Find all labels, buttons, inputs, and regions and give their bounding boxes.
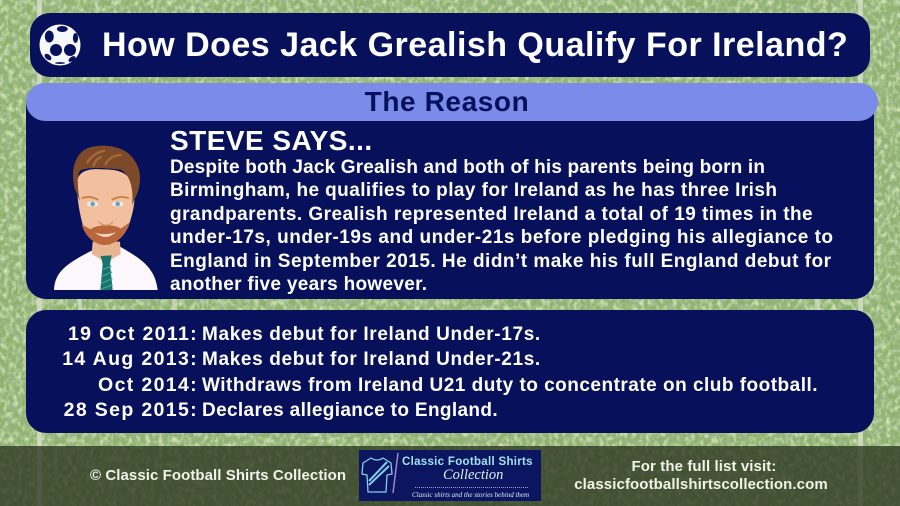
timeline dates: 14 Aug 2013: (62, 348, 198, 370)
timeline dates: Oct 2014: (98, 374, 198, 396)
timeline events: Makes debut for Ireland Under-21s. (202, 349, 541, 370)
timeline dates (62, 323, 198, 421)
hair highlights (87, 151, 122, 167)
eyebrows (82, 197, 129, 200)
reason paragraph: England in September 2015. He didn’t make his full England debut for (170, 251, 831, 272)
timeline dates: 19 Oct 2011: (68, 323, 198, 345)
title bar (30, 13, 870, 77)
logo name: Classic Football Shirts (402, 456, 533, 468)
shirt (54, 247, 158, 290)
heading band: The Reason (26, 83, 878, 121)
reason paragraph: grandparents. Grealish represented Ireland a total of 19 times in the (170, 204, 813, 225)
logo collection: Collection (443, 467, 503, 483)
logo tagline: Classic shirts and the stories behind them (412, 491, 529, 499)
tie stripes (101, 266, 113, 289)
footer copyright: © Classic Football Shirts Collection (90, 467, 346, 484)
beard (82, 223, 129, 245)
footer call to action: classicfootballshirtscollection.com (574, 476, 828, 493)
logo divider (392, 452, 399, 494)
footer call to action: For the full list visit: (632, 458, 776, 475)
timeline events: Makes debut for Ireland Under-17s. (202, 324, 541, 345)
icon: shirt (361, 457, 393, 493)
timeline events: Declares allegiance to England. (202, 400, 498, 421)
tie (100, 255, 113, 290)
reason paragraph: under-17s, under-19s and under-21s before pledging his allegiance to (170, 227, 834, 248)
nose (98, 222, 113, 225)
steve says heading: STEVE SAYS... (170, 125, 373, 156)
timeline dates: 28 Sep 2015: (64, 399, 198, 421)
eyes (87, 201, 123, 207)
logo (359, 450, 541, 501)
hair (73, 146, 140, 205)
panel: timeline (26, 310, 874, 433)
logo dotted line (415, 487, 528, 488)
reason paragraph (170, 157, 834, 295)
footer call to action (574, 458, 828, 493)
heading band: The Reason: The Reason (365, 86, 529, 117)
title text: How Does Jack Grealish Qualify For Ireland? (102, 26, 848, 64)
reason paragraph: Birmingham, he qualifies to play for Ireland as he has three Irish (170, 180, 777, 201)
panel: the reason (26, 84, 874, 299)
face (77, 169, 135, 245)
timeline events: Withdraws from Ireland U21 duty to concentrate on club football. (202, 375, 818, 396)
portrait: Steve cartoon (54, 146, 158, 290)
mouth (95, 232, 116, 237)
neck (92, 242, 121, 263)
reason paragraph: Despite both Jack Grealish and both of his parents being born in (170, 157, 765, 178)
timeline events (202, 324, 818, 421)
icon: football (40, 24, 80, 66)
reason paragraph: another five years however. (170, 274, 427, 295)
